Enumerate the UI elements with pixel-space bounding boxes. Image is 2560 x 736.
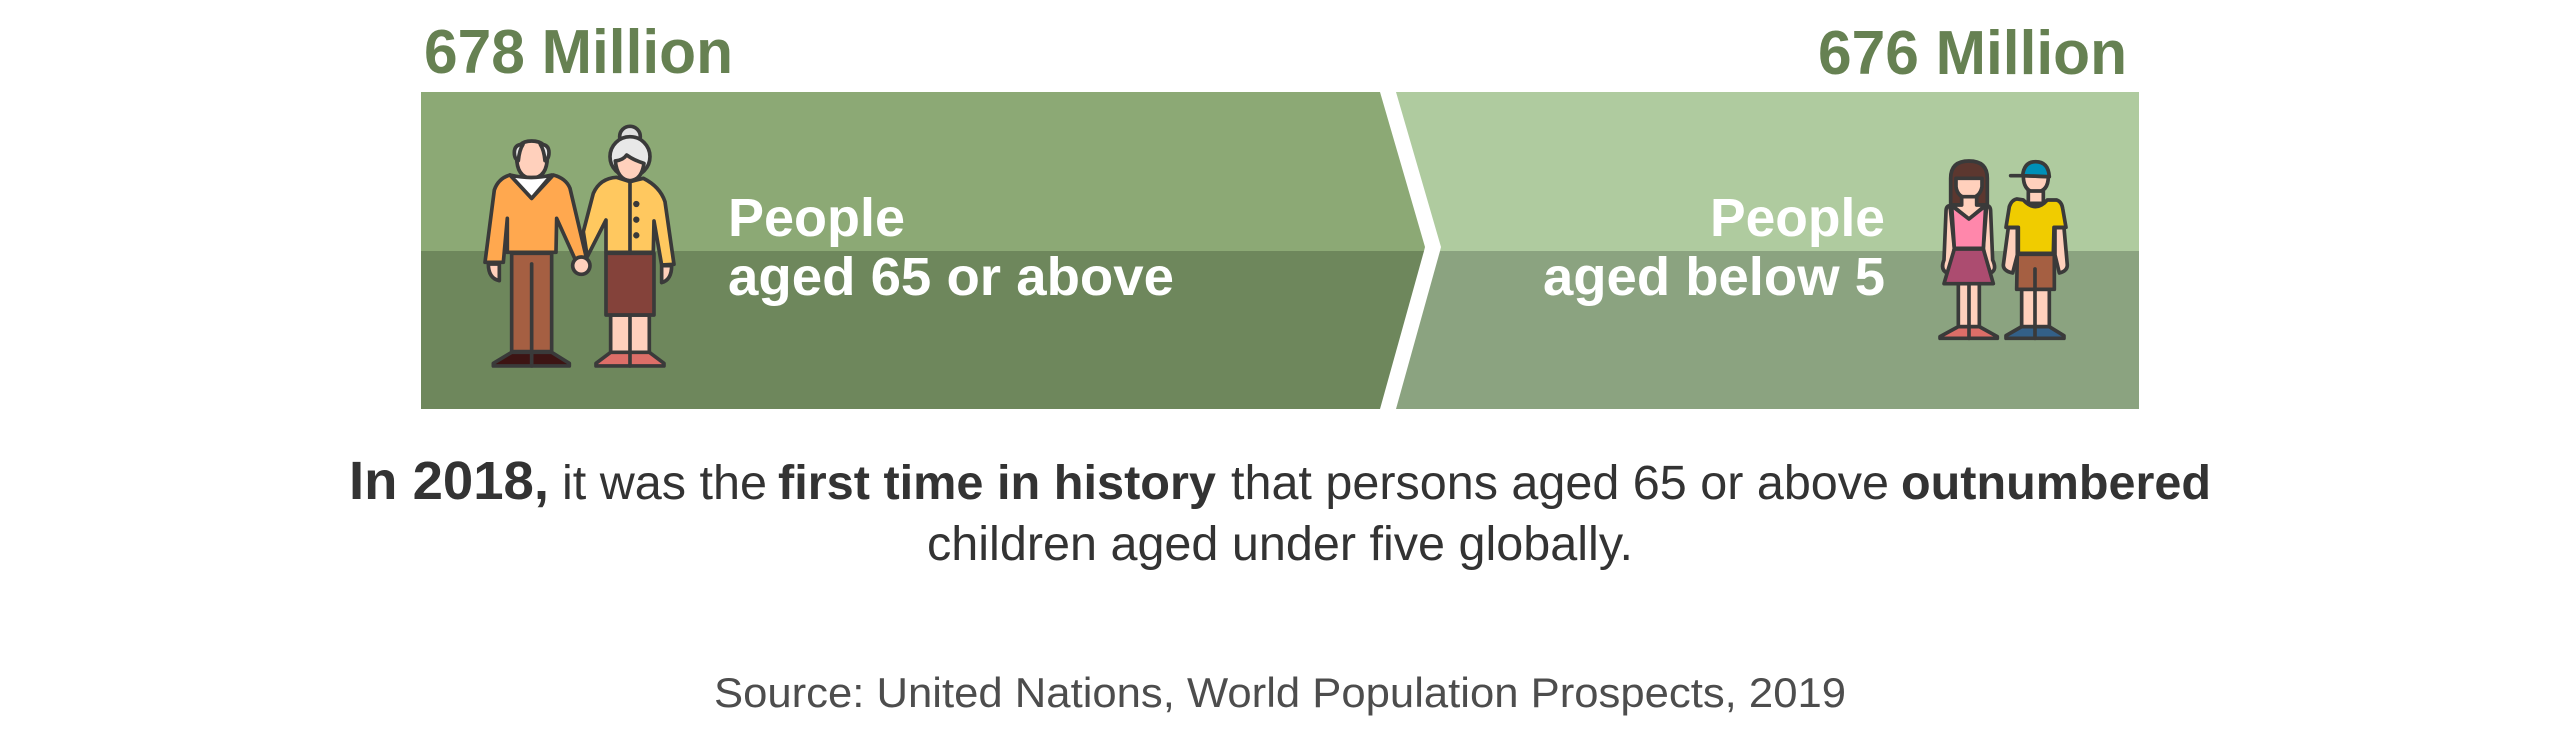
left arrow panel: people aged 65 or above <box>421 92 1425 409</box>
right label: People aged below 5: aged below 5 <box>1543 247 1885 307</box>
right value heading: 676 Million <box>1818 19 2127 88</box>
left value heading: 678 Million <box>424 18 733 87</box>
statement text: first time in history <box>778 457 1216 510</box>
statement text: it was the <box>562 457 767 510</box>
right panel: people aged below 5 <box>1396 92 2139 409</box>
statement text: that persons aged 65 or above <box>1231 457 1889 510</box>
statement text: outnumbered <box>1901 457 2211 510</box>
left label: People aged 65 or above <box>728 188 1174 307</box>
statement text: In 2018, <box>349 451 549 511</box>
icon: girl and boy <box>1940 161 2067 338</box>
left label: People aged 65 or above: aged 65 or above <box>728 247 1174 307</box>
statement text <box>349 451 2211 571</box>
statement text: children aged under five globally. <box>927 518 1633 571</box>
right label: People aged below 5 <box>1543 188 1885 307</box>
right label: People aged below 5: People <box>1710 188 1885 248</box>
source note: Source: United Nations, World Population Prospects, 2019 <box>714 669 1846 716</box>
icon: elderly couple <box>485 126 674 366</box>
left label: People aged 65 or above: People <box>728 188 905 248</box>
